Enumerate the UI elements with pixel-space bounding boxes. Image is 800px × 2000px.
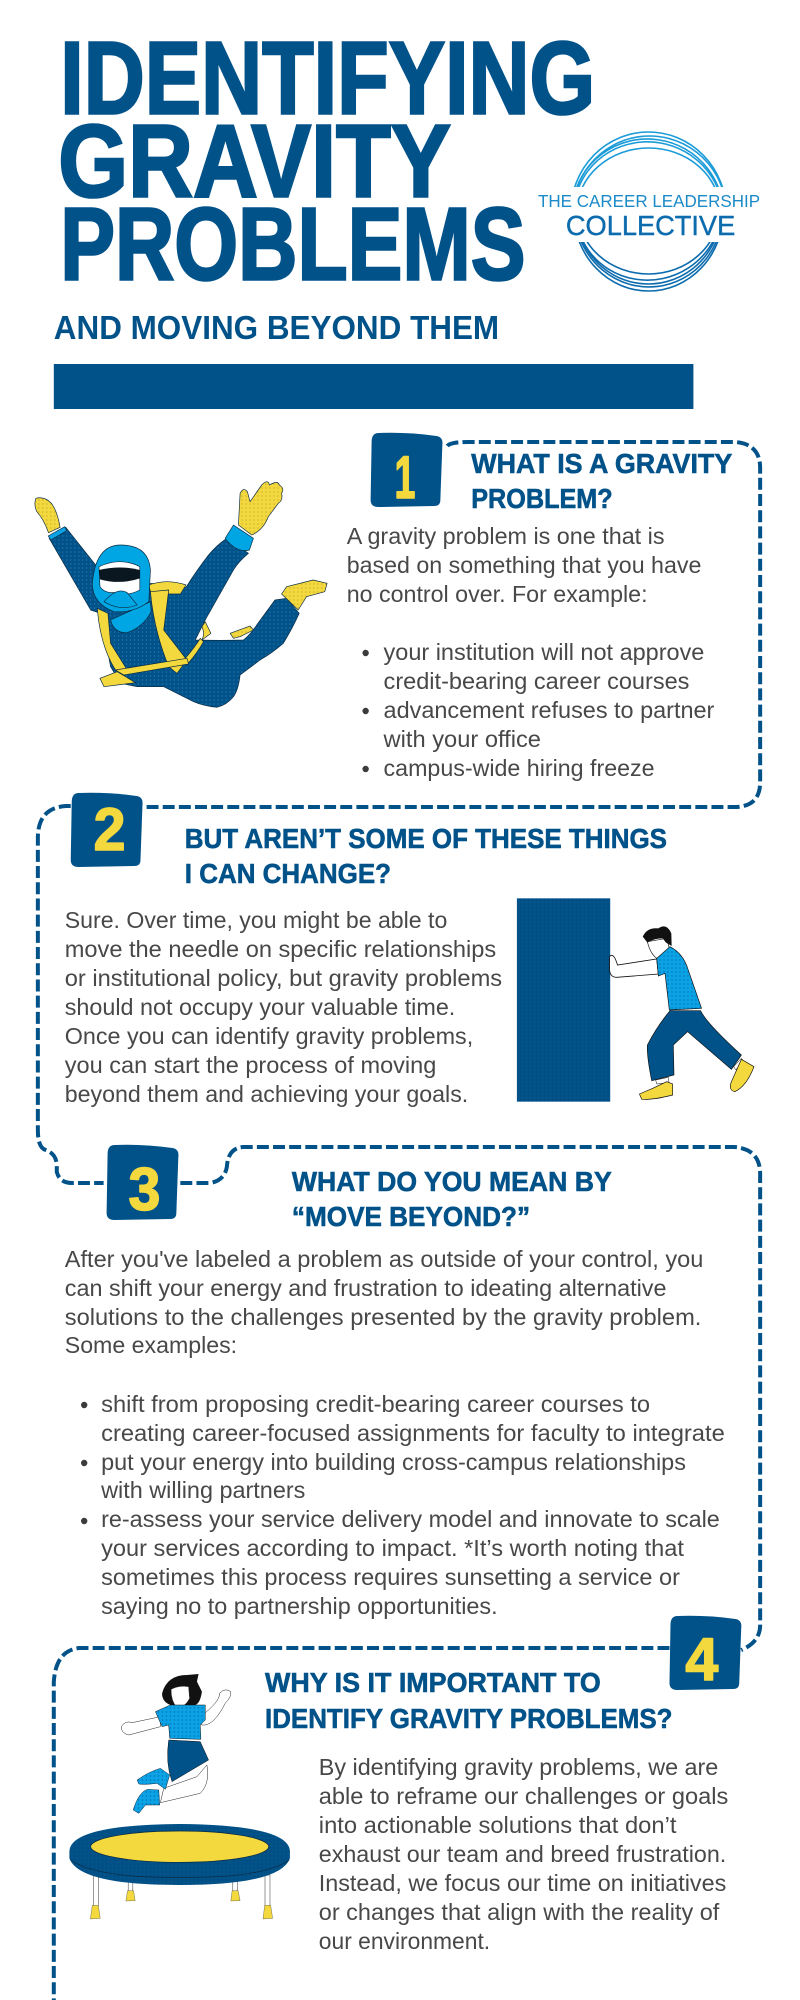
logo: The Career Leadership Collective: THE CAREER LEADERSHIP xyxy=(538,191,760,211)
text: importance: By identifying gravity problems, we are xyxy=(319,1754,718,1780)
list: gravity problem examples: your institution will not approve xyxy=(384,639,704,665)
list: alternative solutions: put your energy into building cross-campus relationships xyxy=(101,1449,686,1475)
badge 4 xyxy=(669,1616,741,1693)
text: importance: our environment. xyxy=(319,1928,490,1954)
list: gravity problem examples: with your office xyxy=(383,726,541,752)
text: answer: Sure. Over time, you might be able to xyxy=(65,907,447,933)
text: explanation: Some examples: xyxy=(65,1332,237,1358)
list: alternative solutions: shift from proposing credit-bearing career courses to xyxy=(101,1391,650,1417)
text: importance: or changes that align with the reality of xyxy=(319,1899,720,1925)
list: gravity problem examples xyxy=(362,639,715,781)
list: alternative solutions: creating career-focused assignments for faculty to integrate xyxy=(101,1420,725,1446)
heading 3: WHAT DO YOU MEAN BY xyxy=(292,1166,612,1197)
panel: what do you mean by move beyond xyxy=(65,1145,760,1650)
title xyxy=(58,21,595,302)
text: definition: based on something that you have xyxy=(347,552,701,578)
text: answer: Once you can identify gravity problems, xyxy=(65,1023,473,1049)
list: alternative solutions xyxy=(81,1391,725,1619)
illustration: girl jumping on trampoline xyxy=(69,1674,290,1919)
title: IDENTIFYING xyxy=(60,21,595,136)
text: explanation: After you've labeled a problem as outside of your control, you xyxy=(65,1246,703,1272)
text: definition xyxy=(347,523,701,607)
panel: but aren't some of these things I can change xyxy=(38,793,754,1183)
heading 4: WHY IS IT IMPORTANT TO xyxy=(265,1667,601,1698)
text: importance: into actionable solutions that don’t xyxy=(319,1812,677,1838)
list: gravity problem examples: advancement refuses to partner xyxy=(384,697,715,723)
text: importance: exhaust our team and breed frustration. xyxy=(319,1841,726,1867)
heading 1: WHAT IS A GRAVITY xyxy=(471,448,733,479)
panel: why is it important xyxy=(54,1616,741,2000)
list: alternative solutions: with willing partners xyxy=(100,1477,305,1503)
subtitle: AND MOVING BEYOND THEM xyxy=(54,309,499,346)
text: importance: able to reframe our challenges or goals xyxy=(319,1783,728,1809)
illustration: skydiver xyxy=(35,482,327,707)
heading 1 xyxy=(471,448,733,514)
badge 2: 2 xyxy=(94,796,126,863)
text: definition: A gravity problem is one that is xyxy=(347,523,665,549)
text: answer: or institutional policy, but gravity problems xyxy=(65,965,502,991)
badge 3: 3 xyxy=(129,1156,160,1223)
text: explanation xyxy=(65,1246,703,1358)
badge 2 xyxy=(71,793,143,867)
list: gravity problem examples: campus-wide hiring freeze xyxy=(384,755,655,781)
heading 1: PROBLEM? xyxy=(471,483,613,514)
badge 3 xyxy=(107,1145,178,1223)
heading 4 xyxy=(265,1667,672,1734)
badge 1 xyxy=(371,433,442,511)
text: answer: should not occupy your valuable time. xyxy=(65,994,455,1020)
banner bar xyxy=(54,364,693,409)
heading 2: BUT AREN’T SOME OF THESE THINGS xyxy=(185,823,667,854)
list: gravity problem examples: credit-bearing career courses xyxy=(384,668,689,694)
list: alternative solutions: your services according to impact. *It’s worth noting that xyxy=(101,1535,685,1561)
list: alternative solutions: saying no to partnership opportunities. xyxy=(101,1593,498,1619)
title: GRAVITY xyxy=(58,104,451,219)
list: alternative solutions: sometimes this process requires sunsetting a service or xyxy=(101,1564,680,1590)
text: answer: move the needle on specific relationships xyxy=(65,936,496,962)
badge 4: 4 xyxy=(685,1626,718,1693)
heading 2 xyxy=(185,823,667,889)
heading 4: IDENTIFY GRAVITY PROBLEMS? xyxy=(265,1703,672,1734)
text: answer: you can start the process of moving xyxy=(65,1052,436,1078)
text: explanation: can shift your energy and frustration to ideating alternative xyxy=(65,1275,667,1301)
text: answer xyxy=(65,907,502,1107)
panel: what is a gravity problem xyxy=(35,433,760,807)
logo: The Career Leadership Collective: COLLECTIVE xyxy=(566,210,735,241)
badge 1: 1 xyxy=(395,444,415,511)
heading 2: I CAN CHANGE? xyxy=(185,858,391,889)
text: answer: beyond them and achieving your goals. xyxy=(65,1081,468,1107)
text: importance xyxy=(319,1754,728,1954)
illustration: person pushing wall xyxy=(517,898,754,1102)
text: importance: Instead, we focus our time on initiatives xyxy=(319,1870,726,1896)
list: alternative solutions: re-assess your service delivery model and innovate to scale xyxy=(101,1506,720,1532)
heading 3 xyxy=(292,1166,612,1232)
heading 3: “MOVE BEYOND?” xyxy=(292,1201,530,1232)
text: definition: no control over. For example: xyxy=(347,581,648,607)
logo: The Career Leadership Collective xyxy=(538,126,760,302)
text: explanation: solutions to the challenges presented by the gravity problem. xyxy=(65,1304,701,1330)
title: PROBLEMS xyxy=(60,187,526,302)
